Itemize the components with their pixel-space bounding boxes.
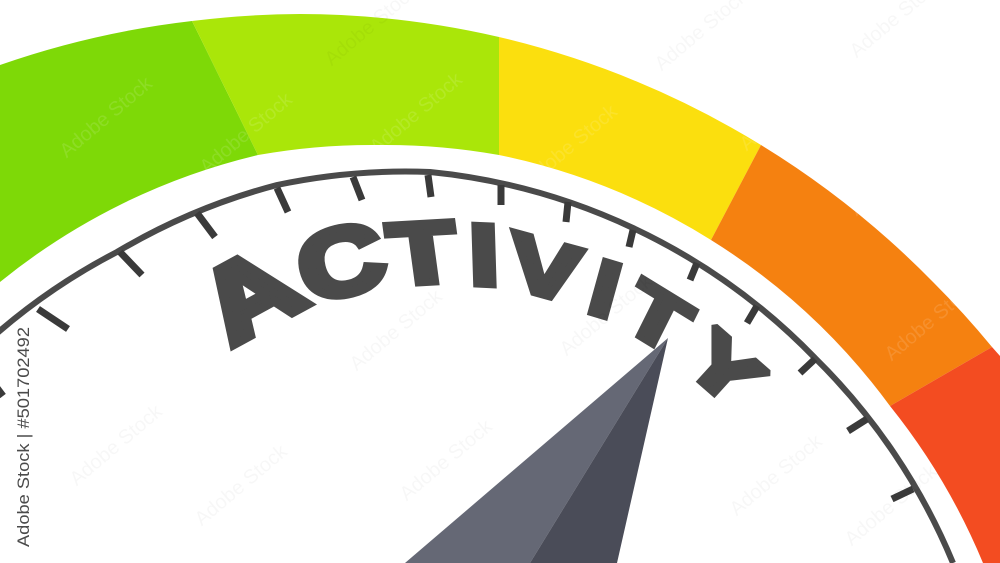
stock watermark pattern: Adobe Stock — [881, 275, 982, 365]
segment: lime — [192, 14, 499, 155]
title: ACTIVITY: T — [612, 264, 703, 372]
stock watermark pattern: Adobe Stock — [191, 440, 292, 530]
segment: green — [0, 21, 258, 282]
segment: orange — [711, 145, 992, 406]
stock watermark pattern: Adobe Stock — [726, 430, 827, 520]
stock watermark pattern: Adobe Stock — [841, 460, 942, 550]
stock watermark pattern: Adobe Stock — [196, 88, 297, 178]
stock watermark pattern: Adobe Stock — [396, 415, 497, 505]
stock id caption: Adobe Stock | #501702492 — [14, 327, 33, 547]
scale arc with tick marks — [0, 172, 953, 563]
needle dark side — [530, 338, 668, 563]
needle — [405, 338, 668, 563]
needle light side — [405, 338, 668, 563]
title: ACTIVITY: C — [287, 200, 395, 324]
stock watermark pattern: Adobe Stock — [56, 72, 157, 162]
title: ACTIVITY: I — [468, 207, 500, 304]
title: ACTIVITY: I — [581, 244, 629, 335]
title: ACTIVITY: V — [505, 215, 585, 322]
segment: red — [890, 347, 1000, 563]
title: ACTIVITY — [174, 200, 780, 424]
segment: yellow — [499, 37, 761, 240]
title: ACTIVITY: A — [174, 224, 325, 365]
title: ACTIVITY: T — [383, 203, 463, 303]
stock watermark pattern: Adobe Stock — [846, 130, 947, 220]
stock watermark pattern: Adobe Stock — [736, 65, 837, 155]
stock watermark pattern: Adobe Stock — [556, 270, 657, 360]
stock watermark pattern: Adobe Stock — [66, 400, 167, 490]
title: ACTIVITY: Y — [668, 313, 780, 424]
stock watermark pattern: Adobe Stock — [346, 285, 447, 375]
stock watermark pattern: Adobe Stock — [521, 100, 622, 190]
stock watermark pattern: Adobe Stock — [366, 68, 467, 158]
